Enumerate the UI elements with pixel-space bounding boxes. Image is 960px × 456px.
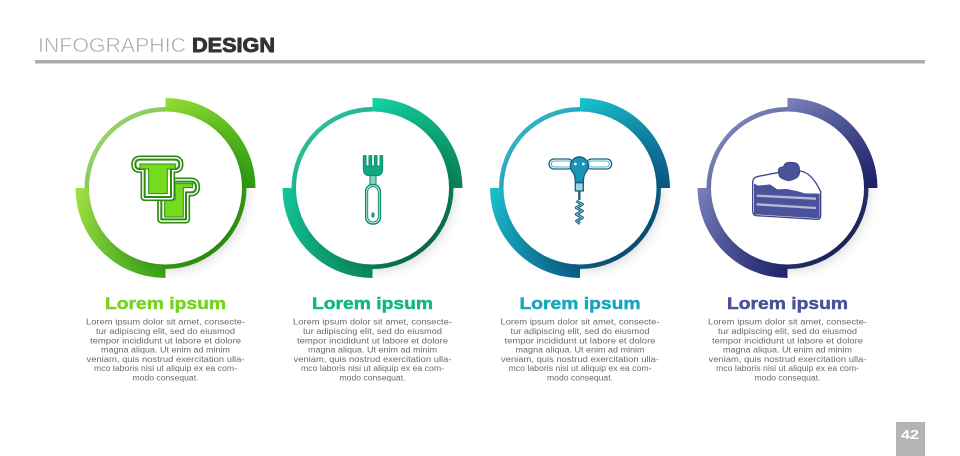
text block: veniam, quis nostrud exercitation ulla-	[294, 355, 452, 364]
heading: Lorem ipsum	[312, 294, 433, 313]
ring: teal circle	[282, 98, 462, 278]
text block: modo consequat.	[340, 374, 406, 382]
text block: mco laboris nisi ut aliquip ex ea com-	[94, 364, 237, 373]
text block	[293, 318, 452, 382]
text block: Lorem ipsum dolor sit amet, consecte-	[293, 318, 452, 326]
page number	[896, 422, 925, 456]
ring: indigo circle	[698, 98, 878, 278]
title: DESIGN	[192, 34, 275, 57]
text block	[500, 318, 660, 382]
text block: tur adipiscing elit, sed do eiusmod	[96, 327, 235, 336]
text block: mco laboris nisi ut aliquip ex ea com-	[301, 364, 444, 373]
icon: corkscrew	[549, 157, 612, 224]
panel: step 1	[76, 98, 256, 382]
text block: Lorem ipsum dolor sit amet, consecte-	[708, 318, 867, 326]
ring: green circle	[76, 98, 256, 278]
text block: veniam, quis nostrud exercitation ulla-	[86, 355, 245, 364]
text block: magna aliqua. Ut enim ad minim	[101, 346, 230, 355]
text block: mco laboris nisi ut aliquip ex ea com-	[716, 364, 859, 373]
heading: Lorem ipsum	[520, 294, 640, 313]
page number: 42	[901, 428, 919, 442]
text block: magna aliqua. Ut enim ad minim	[723, 346, 852, 355]
icon: toast slices	[135, 160, 196, 219]
title	[38, 34, 275, 57]
text block: veniam, quis nostrud exercitation ulla-	[708, 355, 867, 364]
text block: tempor incididunt ut labore et dolore	[504, 336, 656, 345]
text block: tempor incididunt ut labore et dolore	[90, 336, 242, 345]
heading: Lorem ipsum	[105, 294, 226, 313]
heading: Lorem ipsum	[727, 294, 848, 313]
text block: Lorem ipsum dolor sit amet, consecte-	[86, 318, 245, 326]
text block: modo consequat.	[547, 374, 613, 382]
text block: mco laboris nisi ut aliquip ex ea com-	[508, 364, 652, 373]
text block: magna aliqua. Ut enim ad minim	[516, 346, 645, 355]
text block: veniam, quis nostrud exercitation ulla-	[501, 355, 659, 364]
panel: step 4	[698, 98, 878, 382]
text block: magna aliqua. Ut enim ad minim	[308, 346, 437, 355]
text block: tur adipiscing elit, sed do eiusmod	[303, 327, 442, 336]
ring: blue circle	[490, 98, 670, 278]
title: INFOGRAPHIC	[38, 34, 186, 57]
panel: step 3	[490, 98, 670, 382]
text block: tur adipiscing elit, sed do eiusmod	[718, 327, 857, 336]
text block	[86, 318, 245, 382]
text block: modo consequat.	[754, 374, 820, 382]
text block: Lorem ipsum dolor sit amet, consecte-	[500, 318, 660, 326]
icon: fork	[363, 156, 383, 224]
text block: tempor incididunt ut labore et dolore	[712, 336, 864, 345]
text block: modo consequat.	[132, 374, 198, 382]
panel: step 2	[282, 98, 462, 382]
icon: cake slice	[753, 162, 821, 219]
text block	[708, 318, 867, 382]
text block: tempor incididunt ut labore et dolore	[297, 336, 449, 345]
text block: tur adipiscing elit, sed do eiusmod	[510, 327, 650, 336]
